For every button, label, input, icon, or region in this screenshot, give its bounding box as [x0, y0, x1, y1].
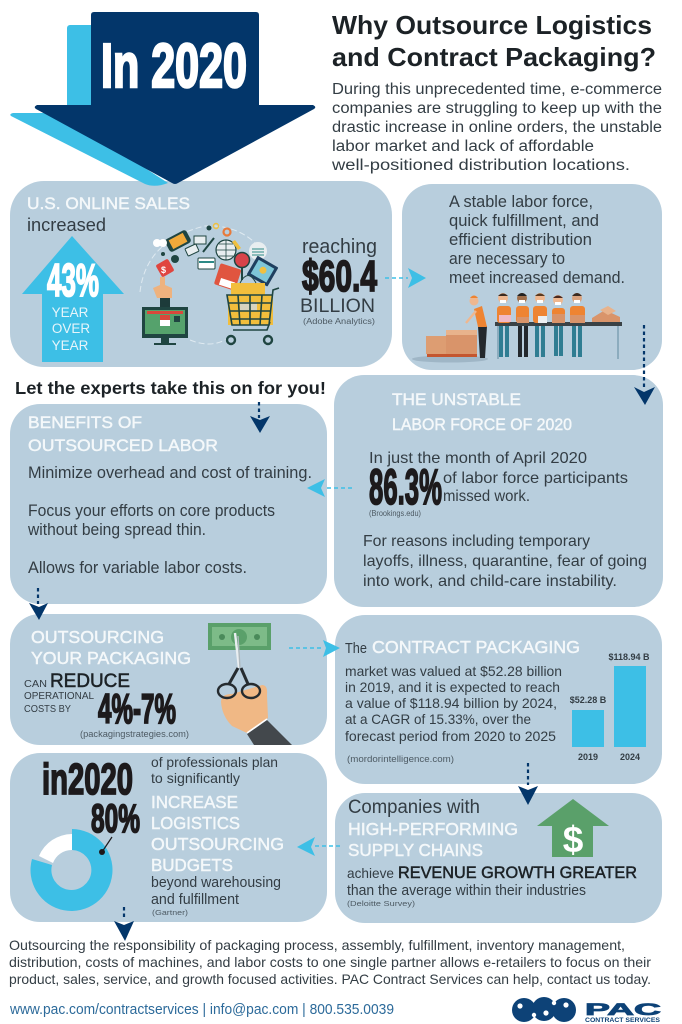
- stat: reaching $60.4 billion: BILLION: [300, 295, 375, 317]
- text: high-performing supply chains: SUPPLY CHAINS: [348, 840, 483, 860]
- text: stable labor force: [449, 192, 625, 287]
- text: increase logistics budgets: to significantly: [151, 770, 240, 786]
- stat: reduce costs 4%-7%: (packagingstrategies.com): [80, 729, 189, 739]
- stat: reduce costs 4%-7%: [24, 670, 189, 739]
- up arrow: 43% year over year: YEAR: [52, 305, 89, 320]
- text: increased: increased: [27, 215, 106, 235]
- panel: benefits of outsourced labor: [10, 404, 327, 604]
- heading: benefits of outsourced labor: BENEFITS OF: [28, 413, 142, 432]
- arrow: stable labor to unstable: [634, 325, 655, 405]
- stat: 86.3% missed work: [369, 450, 628, 518]
- text: closing statement: [9, 937, 651, 987]
- text: high-performing supply chains: (Deloitte Survey): [347, 899, 416, 908]
- text: benefits list: Focus your efforts on core products: [28, 502, 275, 520]
- text: benefits list: Allows for variable labor costs.: [28, 559, 247, 577]
- stat: reduce costs 4%-7%: CAN: [24, 679, 47, 690]
- text: closing statement: Outsourcing the responsibility of packaging process, assembly, fulfillment, inventory management,: [9, 937, 625, 953]
- panel: contract packaging: [335, 615, 662, 784]
- panel: unstable labor force: [334, 375, 663, 607]
- hero arrow: In 2020: In 2020: [101, 32, 247, 101]
- stat: reduce costs 4%-7%: COSTS BY: [24, 704, 71, 715]
- text: high-performing supply chains: HIGH-PERFORMING: [348, 819, 518, 839]
- stat: 86.3% missed work: missed work.: [443, 488, 530, 505]
- stat: reaching $60.4 billion: reaching: [302, 236, 377, 258]
- up arrow: 43% year over year: OVER: [52, 321, 90, 336]
- text: benefits list: [27, 464, 312, 577]
- bar chart: market value: 2024: [620, 752, 640, 762]
- text: reasons: [363, 533, 647, 590]
- title: Why Outsource Logistics: [332, 10, 652, 40]
- text: increase logistics budgets: INCREASE: [151, 792, 238, 812]
- heading: U.S. online sales: U.S. ONLINE SALES: [27, 194, 190, 213]
- hero arrow: In 2020: [10, 12, 315, 186]
- arrow: experts to benefits: [250, 402, 270, 433]
- illustration: packing line workers: [412, 293, 622, 362]
- text: increase logistics budgets: OUTSOURCING: [151, 834, 284, 854]
- arrow: supply chains to budgets: [297, 837, 340, 856]
- stat: reduce costs 4%-7%: 4%-7%: [98, 685, 176, 732]
- heading: benefits of outsourced labor: OUTSOURCED LABOR: [28, 436, 218, 455]
- stat: 86.3% missed work: 86.3%: [369, 459, 442, 515]
- heading: unstable labor force: LABOR FORCE OF 2020: [392, 415, 572, 434]
- logo: PAC Contract Services: PAC: [585, 1000, 661, 1019]
- text: reasons: into work, and child-care instability.: [363, 573, 617, 590]
- heading: contract packaging: The: [345, 640, 367, 657]
- text: market description: forecast period from 2020 to 2025: [345, 728, 556, 744]
- stat: reaching $60.4 billion: [300, 236, 377, 326]
- text: high-performing supply chains: REVENUE GROWTH GREATER: [398, 864, 637, 882]
- text: increase logistics budgets: [151, 754, 284, 917]
- intro text: drastic increase in online orders, the unstable: [332, 119, 662, 136]
- icon: green house with dollar sign: [537, 799, 609, 860]
- stat: in 2020 80%: in2020: [42, 755, 133, 804]
- heading: outsourcing your packaging: OUTSOURCING: [31, 627, 164, 647]
- text: stable labor force: meet increased demand.: [449, 268, 625, 287]
- text: high-performing supply chains: than the average within their industries: [347, 882, 586, 899]
- text: increase logistics budgets: of professionals plan: [151, 754, 278, 770]
- panel: high-performing supply chains: [335, 793, 662, 923]
- text: increase logistics budgets: and fulfillment: [151, 891, 240, 908]
- text: closing statement: product, sales, service, and growth focused activities. PAC Contract Services can help, contact us today.: [9, 971, 651, 987]
- arrow: unstable to benefits: [307, 479, 352, 497]
- text: increase logistics budgets: BUDGETS: [151, 855, 233, 875]
- illustration: online shopping: $: [161, 265, 166, 275]
- panel: outsourcing your packaging: [10, 614, 327, 745]
- text: market description: at a CAGR of 15.33%, over the: [345, 711, 531, 727]
- text: closing statement: distribution, costs of machines, and labor costs to one single partner allows e-retailers to focus on their: [9, 954, 651, 970]
- heading: outsourcing your packaging: [31, 627, 191, 668]
- heading: contract packaging: CONTRACT PACKAGING: [372, 637, 580, 657]
- title: and Contract Packaging?: [332, 42, 656, 72]
- text: increase logistics budgets: LOGISTICS: [151, 813, 240, 833]
- stat: 86.3% missed work: In just the month of April 2020: [369, 450, 587, 467]
- stat: reaching $60.4 billion: $60.4: [302, 252, 377, 301]
- text: market description: in 2019, and it is expected to reach: [345, 679, 560, 695]
- up arrow: 43% year over year: [22, 236, 124, 362]
- intro text: [331, 81, 662, 174]
- stat: reduce costs 4%-7%: REDUCE: [50, 670, 130, 692]
- text: stable labor force: efficient distribution: [449, 230, 592, 249]
- logo: PAC Contract Services: CONTRACT SERVICES: [585, 1018, 660, 1024]
- heading: unstable labor force: THE UNSTABLE: [392, 390, 521, 409]
- text: benefits list: without being spread thin.: [27, 521, 206, 539]
- bar chart: market value: [570, 652, 650, 762]
- intro text: labor market and lack of affordable: [332, 138, 594, 155]
- bar chart: market value: $118.94 B: [608, 652, 650, 662]
- bar chart: market value: $52.28 B: [570, 695, 607, 705]
- text: high-performing supply chains: [347, 797, 637, 908]
- stat: 86.3% missed work: (Brookings.edu): [369, 509, 421, 518]
- stat: in 2020 80%: [42, 755, 140, 841]
- stat: reduce costs 4%-7%: OPERATIONAL: [24, 691, 94, 702]
- text: increase logistics budgets: beyond warehousing: [151, 874, 281, 891]
- arrow: budgets to footer: [114, 907, 134, 941]
- title: [332, 10, 656, 72]
- text: market description: [345, 663, 562, 764]
- text: reasons: layoffs, illness, quarantine, fear of going: [363, 553, 647, 570]
- panel: online sales: [10, 181, 392, 367]
- bar chart: market value: 2019: [578, 752, 598, 762]
- heading: let the experts: Let the experts take this on for you!: [15, 378, 326, 398]
- text: market description: (mordorintelligence.com): [347, 754, 454, 764]
- panel: stable labor force: [402, 184, 662, 370]
- stat: reaching $60.4 billion: (Adobe Analytics): [303, 317, 375, 326]
- text: reasons: For reasons including temporary: [363, 533, 590, 550]
- text: stable labor force: A stable labor force,: [449, 192, 593, 211]
- heading: unstable labor force: [392, 390, 572, 434]
- text: benefits list: Minimize overhead and cost of training.: [28, 464, 312, 482]
- arrow: benefits to packaging: [29, 588, 48, 620]
- intro text: well-positioned distribution locations.: [331, 157, 630, 174]
- illustration: online shopping: [140, 224, 279, 345]
- arrow: packaging to contract: [289, 640, 340, 657]
- text: stable labor force: are necessary to: [449, 249, 565, 268]
- text: high-performing supply chains: achieve: [347, 865, 394, 881]
- text: contact details: www.pac.com/contractservices | info@pac.com | 800.535.0039: [9, 1001, 394, 1018]
- logo: PAC Contract Services: [512, 997, 661, 1024]
- heading: outsourcing your packaging: YOUR PACKAGING: [31, 648, 191, 668]
- stat: in 2020 80%: 80%: [91, 797, 140, 841]
- text: stable labor force: quick fulfillment, and: [449, 211, 599, 230]
- panel: increase logistics budgets: [10, 753, 327, 922]
- text: high-performing supply chains: Companies with: [348, 797, 480, 818]
- arrow: contract to supply chains: [518, 763, 538, 805]
- up arrow: 43% year over year: YEAR: [52, 338, 89, 353]
- icon: scissors cutting money: [208, 623, 292, 745]
- intro text: companies are struggling to keep up with the: [332, 100, 662, 117]
- text: market description: market was valued at $52.28 billion: [345, 663, 562, 679]
- stat: 86.3% missed work: of labor force participants: [443, 470, 628, 487]
- arrow: sales to stable labor: [385, 268, 426, 288]
- up arrow: 43% year over year: 43%: [47, 254, 99, 306]
- heading: benefits of outsourced labor: [28, 413, 218, 455]
- icon: green house with dollar sign: $: [563, 819, 584, 860]
- text: increase logistics budgets: (Gartner): [152, 908, 189, 917]
- chart: 80% donut: [30, 829, 112, 911]
- text: market description: a value of $118.94 billion by 2024,: [345, 695, 557, 711]
- intro text: During this unprecedented time, e-commerce: [332, 81, 662, 98]
